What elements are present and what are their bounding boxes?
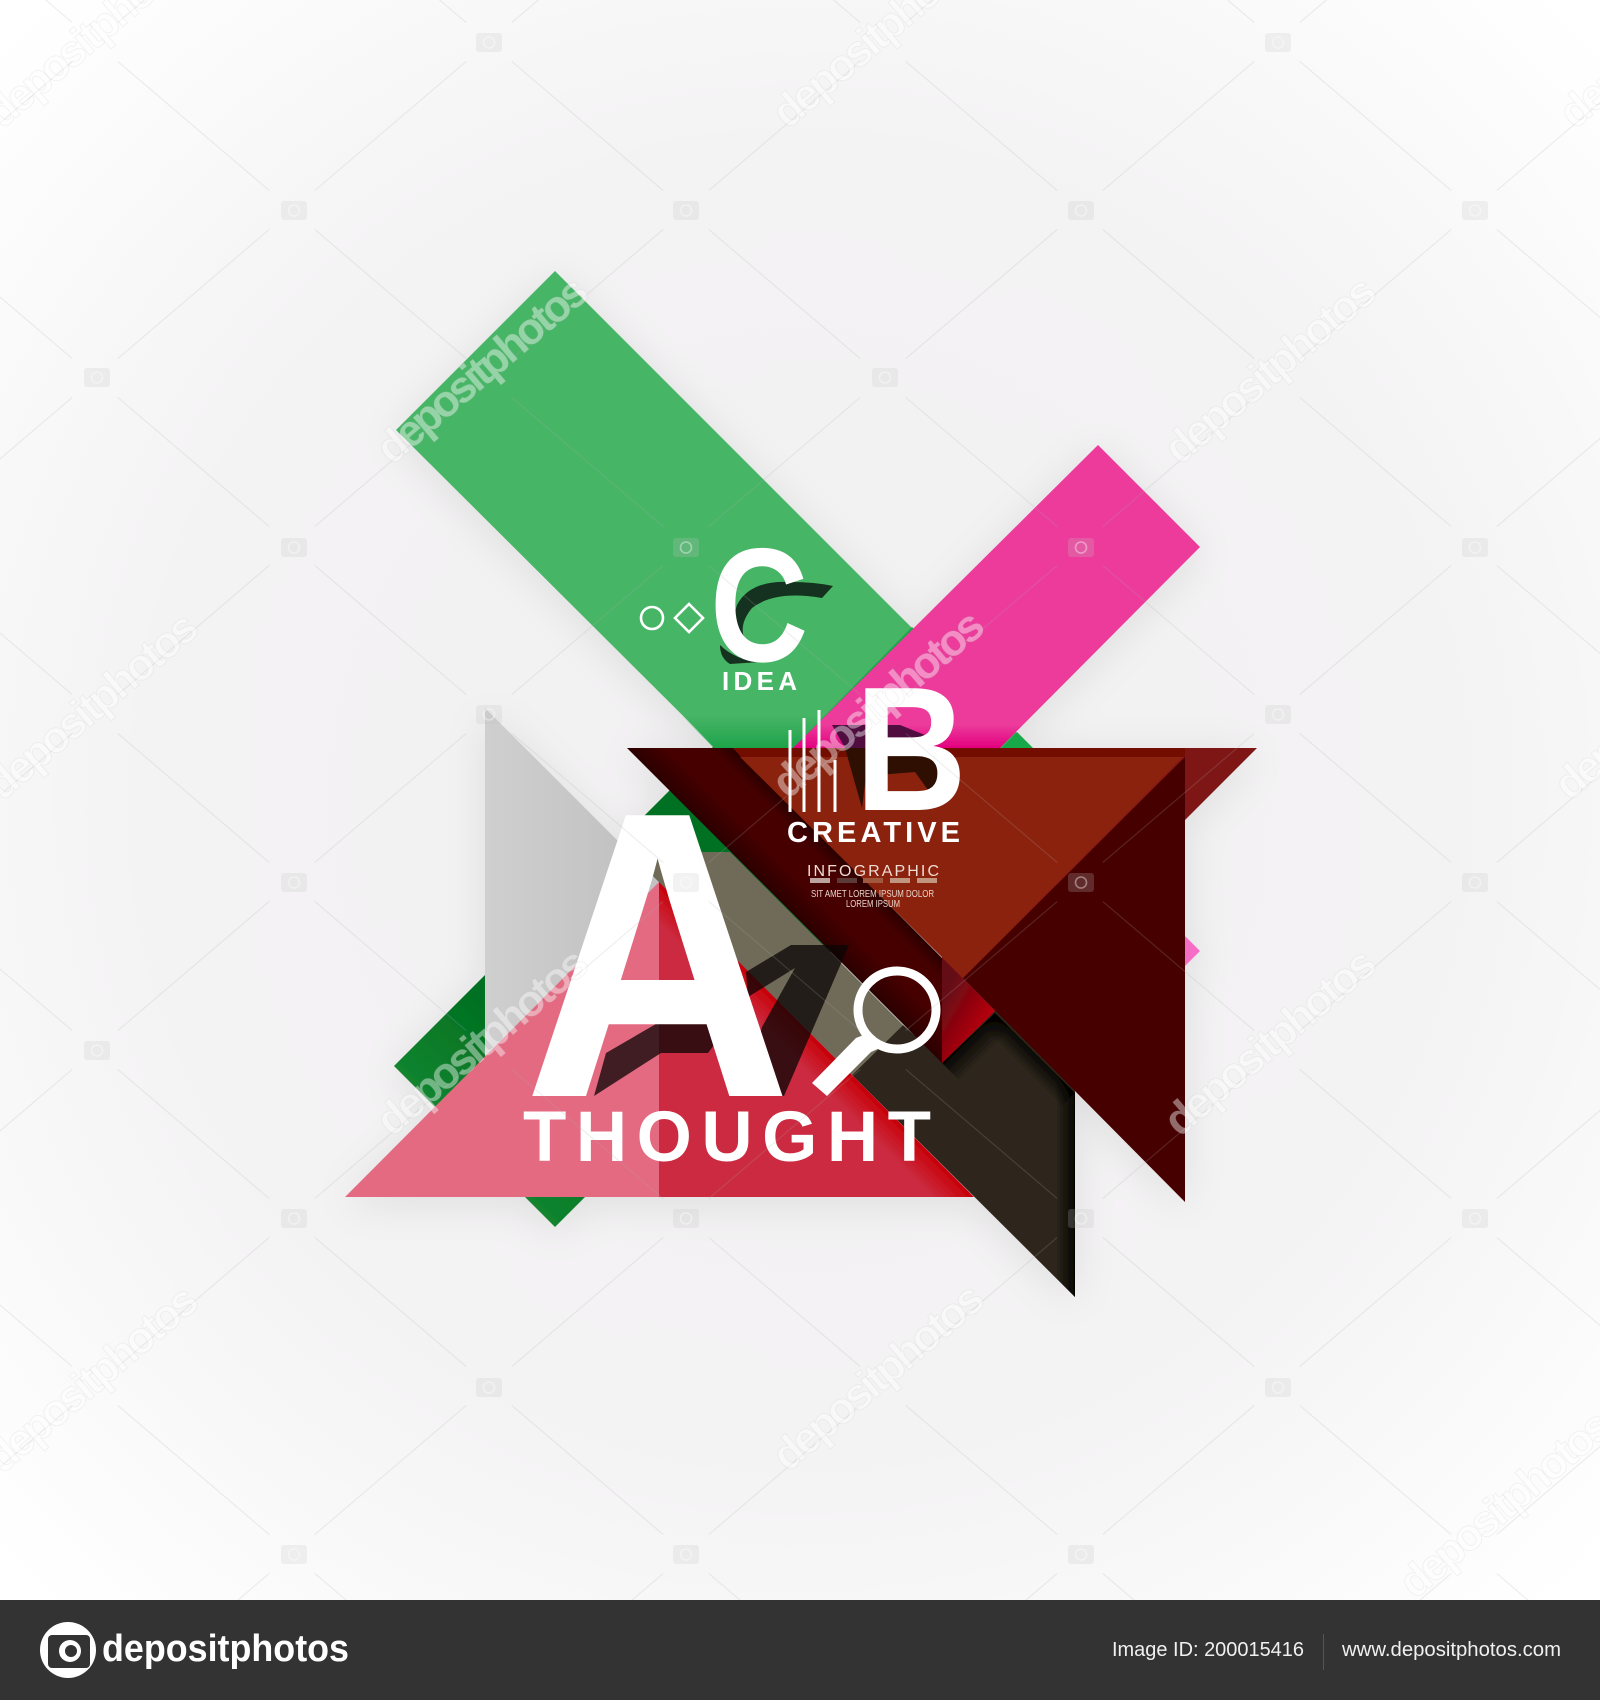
letter: B: B: [855, 650, 967, 848]
watermark text: depositphotos: [763, 600, 994, 808]
icon: circle: [641, 607, 663, 629]
logo: camera badge: [40, 1622, 96, 1678]
brown right edge shadow: [1055, 1073, 1075, 1297]
crimson lower glow: [942, 958, 995, 1063]
band: dark brown: [852, 1005, 1075, 1297]
triangle: gray: [485, 708, 877, 1100]
icon: diamond: [675, 604, 703, 632]
small text: LOREM IPSUM: [846, 899, 900, 910]
website: www.depositphotos.com: [1341, 1639, 1561, 1661]
brown shadow under maroon: [975, 1013, 1075, 1113]
triangle: maroon right: [963, 757, 1185, 1202]
logo: wordmark: depositphotos: [102, 1628, 349, 1670]
triangle: crimson right: [942, 748, 1257, 1063]
triangle: pink half: [345, 882, 659, 1197]
shadow on green from triangle: [681, 715, 826, 748]
tip: bright green: [1001, 732, 1033, 748]
triangle: orange brown: [740, 757, 1183, 978]
strip: maroon top: [733, 748, 1185, 757]
letter: A: A: [523, 726, 792, 1183]
band: pink: [793, 445, 1200, 748]
geometric shape composition: [345, 271, 1257, 1297]
watermark camera icons: [84, 33, 1488, 1564]
band: taupe: [629, 852, 903, 1075]
triangle: red half: [659, 882, 974, 1197]
shadow on green from pink: [793, 627, 950, 748]
letter: C: C: [710, 515, 808, 696]
image id: Image ID: 200015416: [1112, 1639, 1304, 1661]
label: THOUGHT: THOUGHT: [523, 1098, 931, 1177]
watermark text: depositphotos: [1155, 266, 1386, 474]
watermark text: depositphotos: [1155, 938, 1386, 1146]
color bars: [810, 878, 937, 883]
band: maroon: [627, 748, 942, 1063]
watermark text: depositphotos: [763, 1273, 994, 1481]
label: INFOGRAPHIC: INFOGRAPHIC: [807, 863, 939, 880]
small text: [811, 889, 934, 910]
label: CREATIVE: CREATIVE: [787, 817, 960, 849]
band: dark green: [394, 600, 1020, 1227]
small text: SIT AMET LOREM IPSUM DOLOR: [811, 889, 934, 900]
letter shadow: B: [832, 725, 945, 808]
divider: [1323, 1634, 1324, 1670]
icon: magnifier: [812, 971, 936, 1096]
watermark text: depositphotos: [367, 938, 598, 1146]
icon: vertical lines: [788, 710, 836, 812]
letter shadow: C: [720, 582, 833, 664]
band: light green: [396, 271, 1033, 907]
watermark text: depositphotos: [367, 266, 598, 474]
footer bar: [0, 1600, 1600, 1700]
arrow shadow: [594, 945, 849, 1096]
label: IDEA: IDEA: [722, 666, 797, 696]
brown shadow under crimson: [942, 1013, 1020, 1088]
tip: pink: [1185, 936, 1200, 966]
